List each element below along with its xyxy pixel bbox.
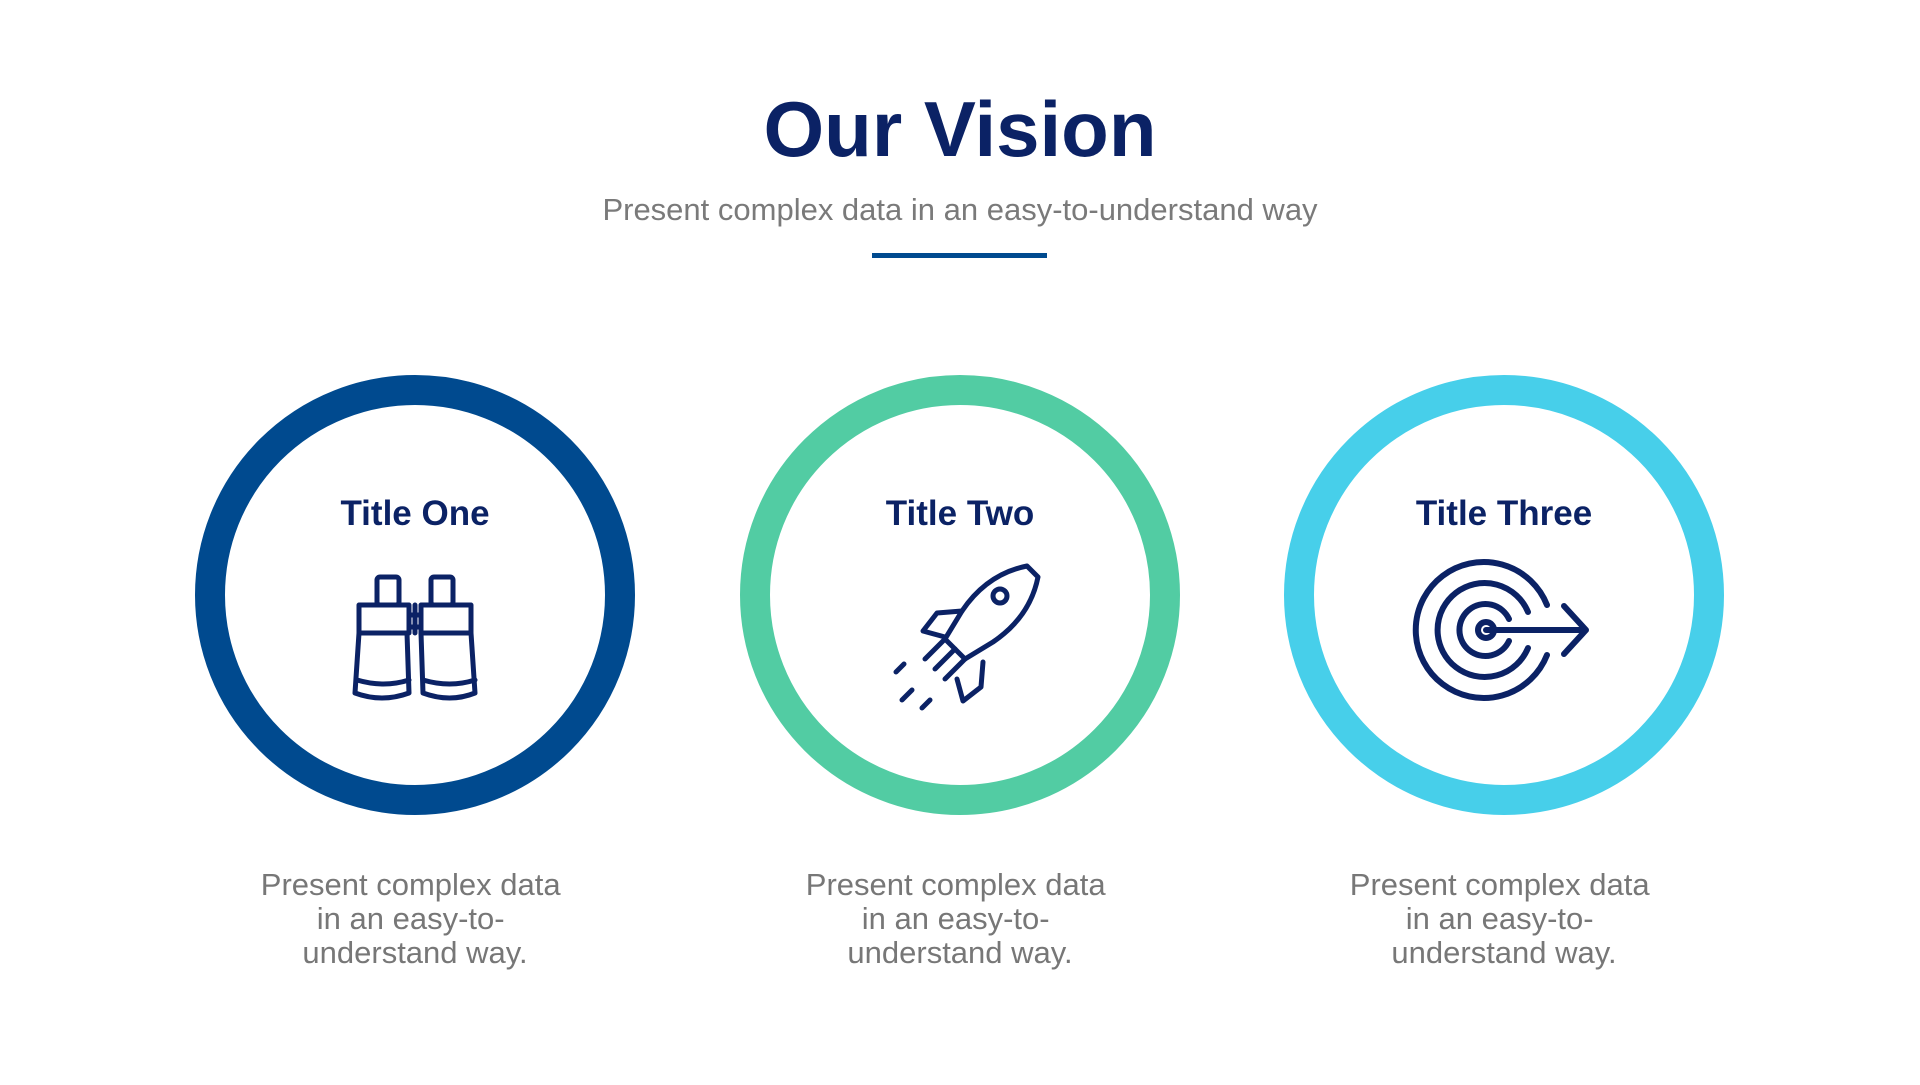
body text two: Present complex data <box>806 867 1106 902</box>
body text two: understand way. <box>847 935 1073 970</box>
body text one: in an easy-to- <box>317 901 505 936</box>
panel: title one <box>210 390 620 970</box>
icon: binoculars <box>355 577 475 698</box>
ring two <box>755 390 1165 800</box>
body text three: understand way. <box>1391 935 1617 970</box>
body text two: in an easy-to- <box>862 901 1050 936</box>
panel: title three <box>1299 390 1709 970</box>
heading two: Title Two <box>886 494 1034 533</box>
body text one: understand way. <box>302 935 528 970</box>
icon: target <box>1416 562 1586 698</box>
underline accent <box>872 253 1047 258</box>
panel: title two <box>755 390 1165 970</box>
ring one <box>210 390 620 800</box>
heading three: Title Three <box>1416 494 1592 533</box>
subtitle: Present complex data in an easy-to-understand way <box>602 192 1318 227</box>
heading one: Title One <box>340 494 490 533</box>
icon: rocket <box>896 566 1038 708</box>
title: Our Vision <box>764 85 1156 173</box>
ring three <box>1299 390 1709 800</box>
body text three: Present complex data <box>1350 867 1650 902</box>
body text one: Present complex data <box>261 867 561 902</box>
body text three: in an easy-to- <box>1406 901 1594 936</box>
